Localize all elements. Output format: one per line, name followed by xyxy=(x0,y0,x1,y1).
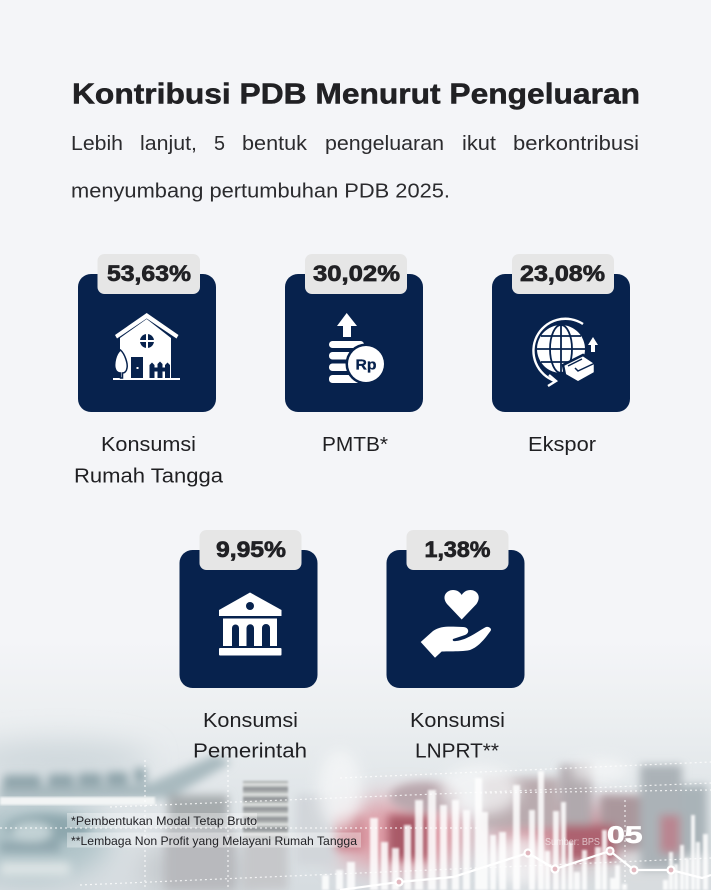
label: Ekspor: Ekspor xyxy=(528,433,596,456)
value badge: 1,38% xyxy=(406,530,508,570)
card: Konsumsi Rumah Tangga xyxy=(74,254,224,488)
value badge: 9,95%: 9,95% xyxy=(216,537,286,562)
value badge: 30,02%: 30,02% xyxy=(313,261,400,286)
card: PMTB xyxy=(285,254,423,456)
soft colour masses xyxy=(0,742,711,890)
intro paragraph: berkontribusi xyxy=(513,132,639,155)
footnote: LNPRT: **Lembaga Non Profit yang Melayani Rumah Tangga xyxy=(71,834,357,848)
white haze xyxy=(318,750,630,885)
keyboard and blurred objects xyxy=(0,755,707,890)
label: Konsumsi Rumah Tangga: Konsumsi xyxy=(101,433,196,456)
page number: 05 xyxy=(607,822,642,849)
dotted grid xyxy=(0,755,711,890)
title: Kontribusi PDB Menurut Pengeluaran xyxy=(72,78,640,110)
label: Konsumsi Pemerintah: Konsumsi xyxy=(203,709,298,732)
chart bars xyxy=(322,771,708,890)
intro paragraph: ikut xyxy=(462,132,496,155)
source note: Sumber: BPS xyxy=(545,837,600,848)
value badge: 23,08% xyxy=(512,254,614,294)
background photo: finance collage xyxy=(0,640,711,890)
intro paragraph: 5 xyxy=(214,132,225,155)
intro paragraph: Lebih xyxy=(71,132,123,155)
value badge: 30,02% xyxy=(305,254,407,294)
intro paragraph: menyumbang pertumbuhan PDB 2025. xyxy=(71,180,450,202)
value badge: 53,63% xyxy=(98,254,200,294)
intro paragraph: bentuk xyxy=(242,132,308,155)
icon: coins with rupiah and up arrow: Rp xyxy=(356,356,376,374)
label: Konsumsi LNPRT: LNPRT** xyxy=(415,740,499,762)
icon: coins with rupiah and up arrow xyxy=(329,313,386,384)
intro paragraph: lanjut, xyxy=(140,132,197,155)
value badge: 23,08%: 23,08% xyxy=(520,261,605,286)
icon: house xyxy=(113,313,180,380)
value badge: 9,95% xyxy=(200,530,302,570)
icon: heart over open hand xyxy=(421,590,491,658)
intro paragraph: pengeluaran xyxy=(325,132,444,155)
card: Konsumsi LNPRT xyxy=(386,530,524,762)
intro paragraph xyxy=(71,132,639,202)
value badge: 1,38%: 1,38% xyxy=(424,537,490,562)
footnote: PMTB: *Pembentukan Modal Tetap Bruto xyxy=(71,814,257,828)
card: Ekspor xyxy=(492,254,630,456)
label: PMTB: PMTB* xyxy=(322,433,388,456)
label: Konsumsi Pemerintah xyxy=(193,709,307,762)
coin stack xyxy=(243,781,288,841)
label: Konsumsi LNPRT: Konsumsi xyxy=(410,709,505,732)
card: Konsumsi Pemerintah xyxy=(180,530,318,762)
label: Konsumsi Rumah Tangga: Rumah Tangga xyxy=(74,464,224,488)
value badge: 53,63%: 53,63% xyxy=(107,261,191,286)
icon: government building xyxy=(219,592,282,656)
icon: globe with export box xyxy=(533,319,598,386)
trend line xyxy=(340,848,711,890)
label: Konsumsi LNPRT xyxy=(410,709,505,762)
label: Konsumsi Rumah Tangga xyxy=(74,433,224,488)
label: Konsumsi Pemerintah: Pemerintah xyxy=(193,740,307,762)
